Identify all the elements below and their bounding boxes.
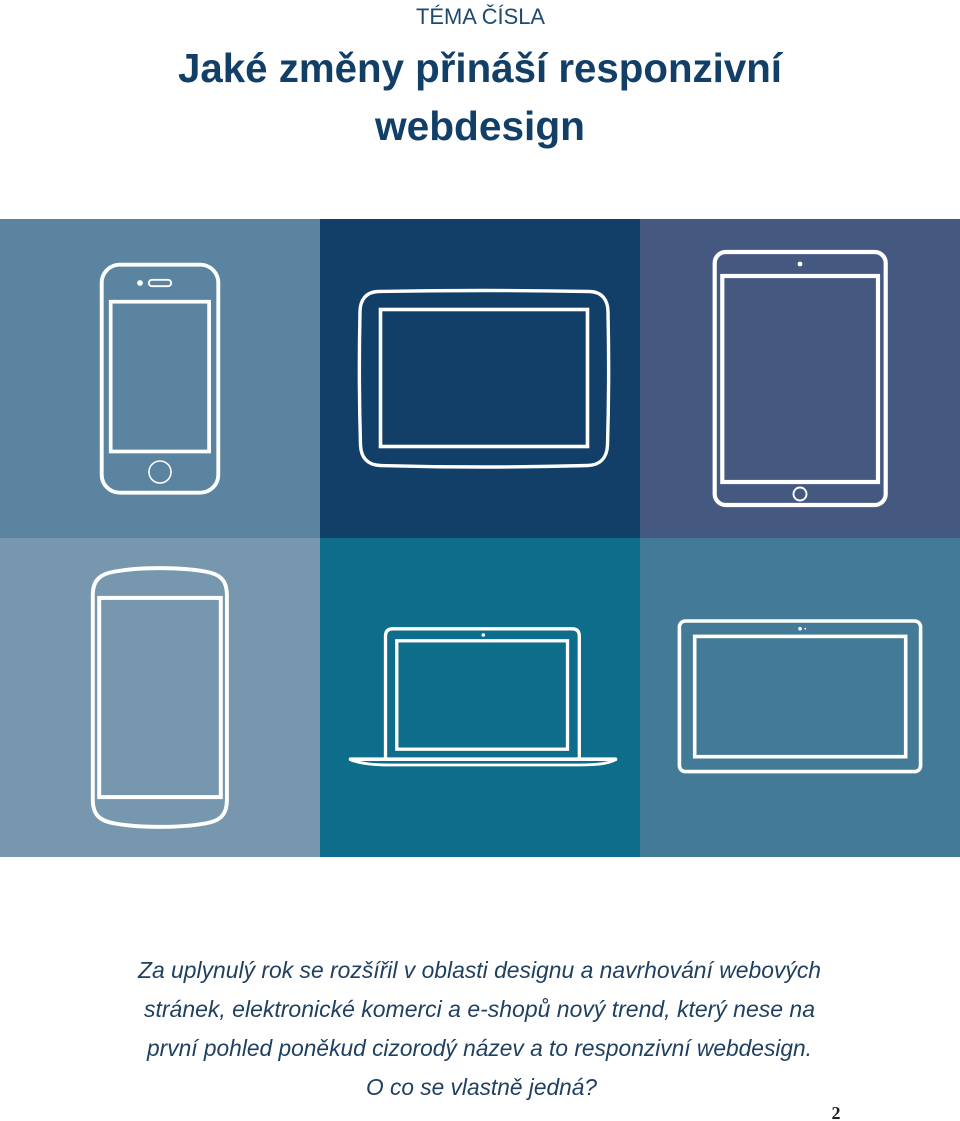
title: [178, 45, 784, 149]
intro text: O co se vlastně jedná?: [366, 1074, 597, 1100]
icon: landscape rounded tablet: [359, 290, 609, 467]
icon: laptop: [350, 629, 616, 765]
intro text: Za uplynulý rok se rozšířil v oblasti designu a navrhování webových: [137, 957, 821, 983]
icon: wide tablet: [679, 621, 921, 772]
panel: portrait tablet: [640, 219, 960, 538]
title: Jaké změny přináší responzivní: [178, 45, 784, 91]
icon: phone with curved edges: [93, 568, 227, 827]
panel: wide tablet: [640, 538, 960, 857]
section label: TÉMA ČÍSLA: [416, 4, 545, 29]
intro text: stránek, elektronické komerci a e-shopů nový trend, který nese na: [144, 996, 815, 1022]
icon: portrait tablet: [715, 252, 886, 505]
title: webdesign: [374, 103, 585, 149]
icon: phone with home button: [102, 265, 218, 493]
panel: laptop: [320, 538, 640, 857]
panel: phone with home button: [0, 219, 320, 538]
panel: landscape rounded tablet: [320, 219, 640, 538]
panel: phone with curved edges: [0, 538, 320, 857]
intro text: [137, 957, 821, 1100]
intro text: první pohled poněkud cizorodý název a to responzivní webdesign.: [146, 1035, 812, 1061]
